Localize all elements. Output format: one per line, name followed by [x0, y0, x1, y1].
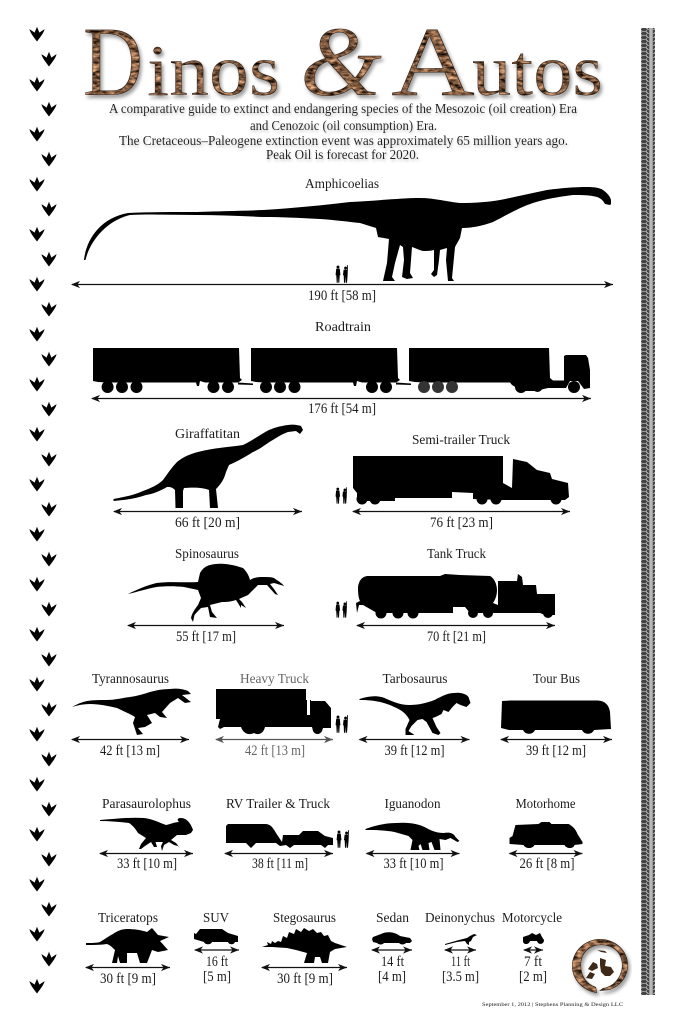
human scale figures: [336, 487, 347, 504]
panel: Tarbosaurus: 39 ft [12 m]: [384, 743, 444, 759]
dimension arrow: [86, 966, 170, 968]
silhouette: Amphicoelias: [84, 187, 611, 281]
panel: Parasaurolophus: 33 ft [10 m]: [117, 856, 177, 872]
panel: Heavy Truck: [216, 671, 348, 759]
panel: Tyrannosaurus: Tyrannosaurus: [92, 671, 169, 686]
panel: Roadtrain: 176 ft [54 m]: [308, 401, 376, 417]
silhouette: Giraffatitan: [114, 425, 303, 508]
silhouette: SUV: [194, 929, 238, 944]
silhouette: tank truck: [356, 574, 555, 615]
panel: Sedan: [372, 910, 412, 985]
dimension arrow: [366, 852, 460, 854]
panel: Sedan: 14 ft: [381, 954, 404, 970]
panel: SUV: [5 m]: [203, 969, 231, 985]
panel: Iguanodon: 33 ft [10 m]: [384, 856, 444, 872]
panel: Tank Truck: 70 ft [21 m]: [427, 629, 486, 645]
title: utos: [472, 30, 603, 111]
panel: Parasaurolophus: Parasaurolophus: [102, 796, 191, 811]
human scale figures: [336, 715, 348, 733]
panel: Deinonychus: [3.5 m]: [442, 969, 479, 985]
silhouette: tour bus: [501, 700, 611, 734]
panel: Giraffatitan: [114, 425, 303, 531]
panel: Spinosaurus: 55 ft [17 m]: [176, 629, 236, 645]
panel: Giraffatitan: Giraffatitan: [175, 426, 240, 441]
silhouette: heavy truck: [216, 689, 331, 734]
panel: Tank Truck: Tank Truck: [427, 546, 486, 561]
silhouette: Deinonychus: [445, 934, 477, 945]
panel: Semi-trailer Truck: Semi-trailer Truck: [412, 432, 510, 447]
panel: Heavy Truck: Heavy Truck: [240, 671, 309, 686]
human scale figures: [337, 830, 349, 848]
panel: Heavy Truck: 42 ft [13 m]: [245, 743, 305, 759]
panel: Motorcycle: 7 ft: [524, 954, 542, 970]
panel: Triceratops: [86, 910, 170, 987]
silhouette: motorhome: [510, 822, 582, 848]
dimension arrow: [92, 398, 591, 400]
panel: Tour Bus: Tour Bus: [533, 671, 580, 686]
dimension arrow: [262, 966, 347, 968]
panel: Motorcycle: [2 m]: [519, 969, 547, 985]
panel: Amphicoelias: [72, 176, 613, 304]
silhouette: Iguanodon: [366, 823, 460, 850]
silhouette: semi-trailer truck: [353, 456, 569, 501]
silhouette: sedan: [372, 932, 412, 944]
dimension arrow: [72, 738, 189, 740]
continents and bird: [586, 950, 614, 979]
panel: Tyrannosaurus: 42 ft [13 m]: [100, 743, 160, 759]
left border: dinosaur footprints: [29, 26, 57, 994]
dimension arrow: [216, 738, 333, 740]
silhouette: RV trailer and pickup truck: [226, 824, 333, 848]
dimension arrow: [195, 949, 239, 951]
wheels: [102, 381, 580, 393]
panel: Roadtrain: [92, 319, 591, 417]
dimension arrow: [100, 852, 193, 854]
title: A: [391, 6, 475, 117]
panel: Tarbosaurus: Tarbosaurus: [382, 671, 448, 686]
silhouette: roadtrain truck: [93, 348, 590, 391]
panel: Roadtrain: Roadtrain: [315, 319, 371, 334]
human scale figures: [336, 601, 347, 618]
panel: Motorhome: Motorhome: [516, 796, 576, 811]
dimension arrow: [72, 284, 613, 286]
panel: Sedan: Sedan: [376, 910, 409, 925]
dimension arrow: [357, 624, 555, 626]
panel: Spinosaurus: Spinosaurus: [175, 546, 239, 561]
panel: Tour Bus: 39 ft [12 m]: [526, 743, 586, 759]
panel: Spinosaurus: [128, 546, 284, 645]
panel: Parasaurolophus: [100, 796, 193, 872]
subtitle text block: The Cretaceous–Paleogene extinction event was approximately 65 million years ago.: [119, 134, 568, 149]
dimension arrow: [510, 852, 582, 854]
silhouette: Tarbosaurus: [360, 693, 470, 735]
footer credit: September 1, 2012 | Stephens Planning & Design LLC: [482, 1002, 623, 1008]
panel: Deinonychus: Deinonychus: [425, 910, 495, 925]
panel: Amphicoelias: Amphicoelias: [305, 176, 379, 191]
panel: SUV: [194, 910, 239, 985]
silhouette: Triceratops: [86, 928, 169, 963]
panel: Sedan: [4 m]: [378, 969, 406, 985]
panel: SUV: SUV: [203, 910, 229, 925]
dimension arrow: [128, 624, 284, 626]
silhouette: Spinosaurus: [128, 564, 284, 622]
panel: RV Trailer and Truck: RV Trailer & Truck: [226, 796, 330, 811]
panel: Semi-trailer Truck: [336, 432, 570, 531]
panel: Amphicoelias: 190 ft [58 m]: [308, 288, 376, 304]
right border: tire tread strip: [641, 28, 655, 995]
subtitle text block: and Cenozoic (oil consumption) Era.: [250, 119, 437, 134]
silhouette: Stegosaurus: [262, 928, 347, 963]
silhouette: motorcycle: [523, 933, 544, 944]
panel: Motorcycle: [502, 910, 562, 985]
wheels: [356, 494, 562, 504]
dimension arrow: [501, 738, 612, 740]
panel: Triceratops: Triceratops: [98, 910, 158, 925]
panel: Deinonychus: [425, 910, 495, 985]
title: &: [300, 6, 382, 117]
silhouette: Parasaurolophus: [100, 818, 193, 851]
panel: Triceratops: 30 ft [9 m]: [100, 971, 156, 987]
title: [83, 6, 603, 117]
panel: Iguanodon: [366, 796, 460, 872]
dimension arrow: [445, 949, 476, 951]
dimension arrow: [360, 738, 470, 740]
panel: Deinonychus: 11 ft: [451, 954, 470, 970]
dimension arrow: [372, 949, 412, 951]
panel: Semi-trailer Truck: 76 ft [23 m]: [430, 515, 493, 531]
panel: Motorhome: 26 ft [8 m]: [520, 856, 574, 872]
subtitle text block: A comparative guide to extinct and endangering species of the Mesozoic (oil creation) Era: [109, 102, 578, 117]
dimension arrow: [353, 510, 570, 512]
dimension arrow: [114, 510, 302, 512]
title: inos: [147, 30, 280, 111]
title: D: [83, 6, 143, 117]
wheels: [376, 608, 553, 618]
panel: Tyrannosaurus: [72, 671, 191, 759]
panel: Iguanodon: Iguanodon: [384, 796, 441, 811]
panel: Tank Truck: [336, 546, 555, 645]
panel: Motorcycle: Motorcycle: [502, 910, 562, 925]
subtitle text block: Peak Oil is forecast for 2020.: [266, 148, 419, 163]
panel: Stegosaurus: Stegosaurus: [273, 910, 336, 925]
icon: circular logo with continents: [572, 939, 628, 993]
silhouette: Tyrannosaurus: [72, 689, 191, 735]
panel: SUV: 16 ft: [206, 954, 228, 970]
human scale figures: [336, 265, 348, 283]
dimension arrow: [225, 852, 333, 854]
panel: Giraffatitan: 66 ft [20 m]: [175, 515, 240, 531]
panel: Stegosaurus: [262, 910, 347, 987]
panel: Tarbosaurus: [360, 671, 470, 759]
subtitle text block: [109, 102, 578, 163]
panel: Stegosaurus: 30 ft [9 m]: [277, 971, 333, 987]
panel: Tour Bus: [501, 671, 612, 759]
panel: RV Trailer and Truck: 38 ft [11 m]: [252, 856, 308, 872]
panel: RV Trailer and Truck: [225, 796, 349, 872]
dimension arrow: [524, 949, 543, 951]
panel: Motorhome: [510, 796, 582, 872]
